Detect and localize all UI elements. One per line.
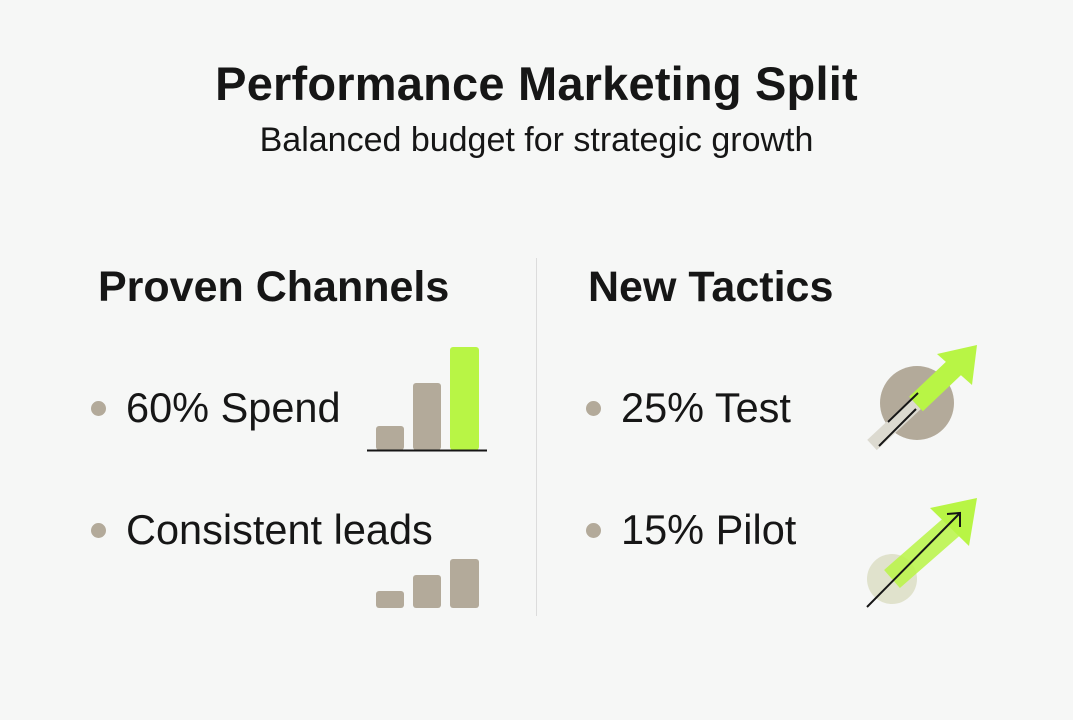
divider	[536, 258, 537, 616]
item: 25% test: 25% Test	[621, 384, 791, 431]
item: 60% spend: 60% Spend	[126, 384, 341, 431]
title: Performance Marketing Split	[215, 57, 858, 110]
subtitle: Balanced budget for strategic growth	[260, 121, 813, 159]
icon: pilot arrow	[866, 498, 977, 608]
item: 15% pilot: 15% Pilot	[621, 506, 796, 553]
panel: new tactics	[586, 263, 833, 553]
heading: proven channels: Proven Channels	[98, 263, 449, 311]
icon: test arrow	[867, 345, 977, 450]
heading: new tactics: New Tactics	[588, 263, 833, 311]
bar chart: spend	[367, 347, 487, 452]
item: consistent leads: Consistent leads	[126, 506, 433, 553]
panel: proven channels	[91, 263, 449, 553]
bar chart: leads	[376, 559, 479, 608]
